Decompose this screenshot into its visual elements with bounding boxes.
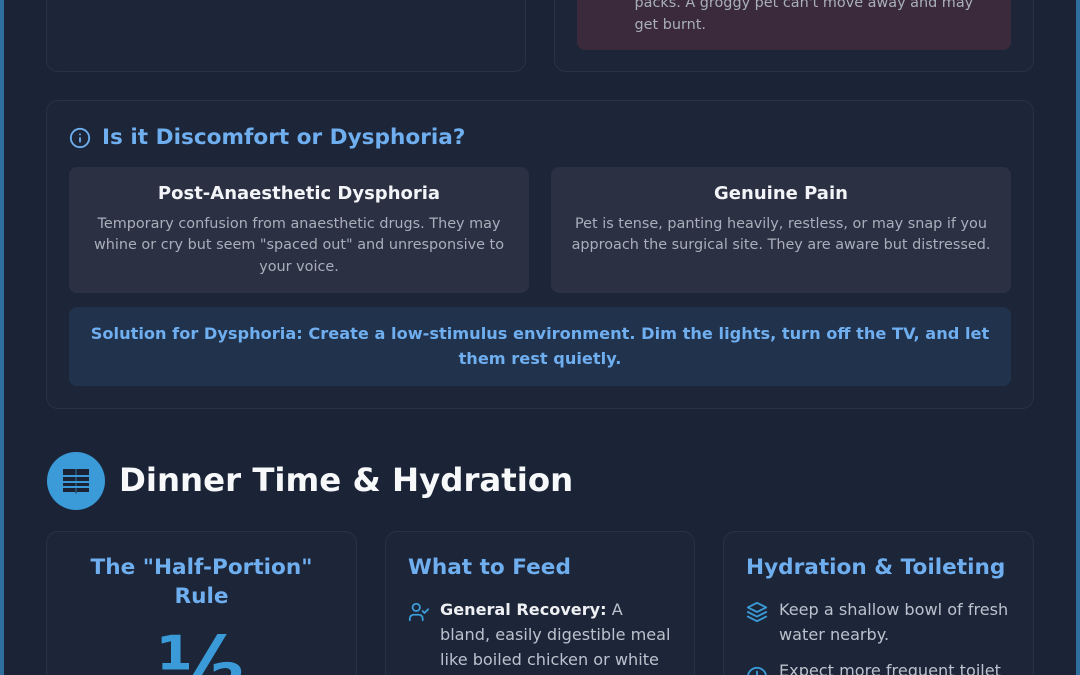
description xyxy=(94,216,504,275)
right page accent bar xyxy=(1076,0,1080,675)
warning callout xyxy=(577,0,1011,50)
panel: post-anaesthetic dysphoria xyxy=(69,167,529,293)
description: approach the surgical site. They are aware but distressed. xyxy=(572,237,990,253)
icon: user check xyxy=(408,602,430,622)
icon: open book badge xyxy=(47,452,105,510)
panel: half-portion rule xyxy=(46,531,357,675)
feed text: bland, easily digestible meal xyxy=(440,625,671,644)
description: Temporary confusion from anaesthetic drugs. They may xyxy=(98,216,500,232)
callout: solution xyxy=(69,307,1011,386)
description: Pet is tense, panting heavily, restless, or may snap if you xyxy=(575,216,987,232)
water text: water nearby. xyxy=(779,625,889,644)
description: your voice. xyxy=(259,259,339,275)
icon: layers xyxy=(746,602,768,622)
panel: hydration and toileting xyxy=(723,531,1034,675)
heading: The "Half-Portion" xyxy=(90,555,313,580)
icon: clock, clipped by the frame edge xyxy=(747,666,767,675)
panel: genuine pain xyxy=(551,167,1011,293)
heading: Rule xyxy=(174,584,229,609)
solution text: Solution for Dysphoria: Create a low-stimulus environment. Dim the lights, turn off the TV, and let xyxy=(91,324,989,343)
subheading: Post-Anaesthetic Dysphoria xyxy=(158,183,440,204)
solution text xyxy=(91,324,989,368)
feed text xyxy=(440,600,671,669)
heading xyxy=(90,555,313,609)
solution text: them rest quietly. xyxy=(459,349,621,368)
icon: info xyxy=(70,128,90,148)
heading: Is it Discomfort or Dysphoria? xyxy=(102,125,465,150)
heading: What to Feed xyxy=(408,555,571,580)
subheading: Genuine Pain xyxy=(714,183,848,204)
description xyxy=(572,216,990,253)
left page accent bar xyxy=(0,0,4,675)
panel: discomfort or dysphoria xyxy=(46,100,1034,409)
panel: upper left card xyxy=(46,0,526,72)
panel: upper right card xyxy=(554,0,1034,72)
feed text: like boiled chicken or white xyxy=(440,650,659,669)
water text: Keep a shallow bowl of fresh xyxy=(779,600,1008,619)
warning text: get burnt. xyxy=(634,17,706,33)
panel: what to feed xyxy=(385,531,695,675)
description: whine or cry but seem "spaced out" and unresponsive to xyxy=(94,237,504,253)
feed text: General Recovery: A xyxy=(440,600,623,619)
warning text xyxy=(634,0,973,33)
heading: Hydration & Toileting xyxy=(746,555,1005,580)
section heading: Dinner Time & Hydration xyxy=(119,461,573,499)
water text xyxy=(779,600,1008,644)
